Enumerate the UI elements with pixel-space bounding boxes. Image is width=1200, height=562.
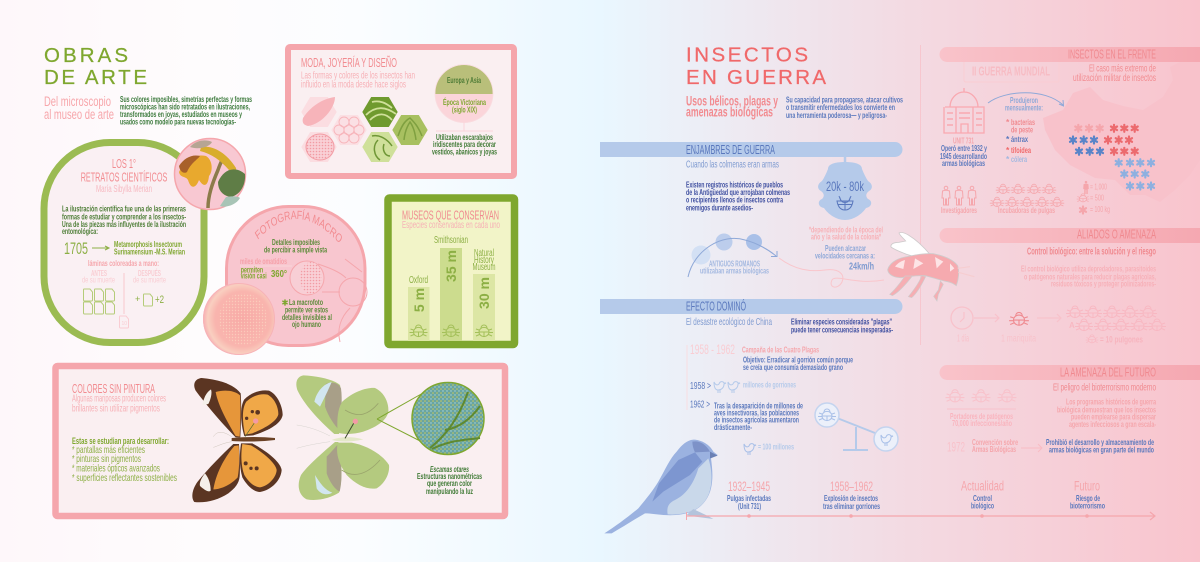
timeline guide [686, 345, 688, 410]
speed callout: Pueden alcanzar [825, 243, 866, 253]
title: obras de arte [44, 44, 147, 89]
text: campaña de las cuatro plagas: Campaña de las Cuatro Plagas [742, 344, 819, 354]
list: producción mensual: * [1006, 117, 1010, 127]
panel: moda, joyería y diseño [288, 47, 514, 176]
label box: II guerra mundial: II GUERRA MUNDIAL [972, 64, 1050, 79]
label: omatidios: miles de omatidios [240, 256, 287, 266]
subtitle: usos bélicos: Usos bélicos, plagas y [686, 94, 778, 109]
label: omatidios [240, 256, 287, 280]
panel: colores sin pintura [56, 366, 505, 516]
bar chart: especies por museo: 35 m [443, 250, 459, 282]
title: obras de arte: OBRAS [44, 44, 128, 67]
comparison: láminas antes y después: DESPUÉS [138, 268, 161, 278]
caption: escamas: manipulando la luz [426, 486, 473, 496]
panel: fotografía macro [203, 205, 368, 355]
milestone: 1932–1945: 1932–1945 [728, 479, 770, 494]
section bar: aliados [940, 228, 1200, 243]
bar chart: especies por museo: 5 m [411, 288, 427, 312]
pictogram: pulgones [1066, 306, 1166, 344]
label box: II guerra mundial [964, 62, 1059, 82]
list: producción mensual: bacterias [1011, 117, 1035, 127]
year 1705 callout: Metamorphosis Insectorum [114, 239, 182, 249]
section: efecto dominó [600, 299, 902, 455]
pictogram: incubadoras [990, 184, 1064, 215]
section bar: enjambres [600, 142, 902, 157]
body text: retratos [62, 204, 186, 236]
icons: portadores [946, 390, 1016, 409]
heading: museos: MUSEOS QUE CONSERVAN [402, 208, 499, 222]
text: eliminar especies [791, 316, 893, 335]
icon: clock one day: 1 día [957, 334, 969, 345]
icon: clock one day [951, 307, 999, 345]
row: 1962 insectos: drásticamente- [714, 422, 752, 432]
legend: unidades: = 500 [1090, 192, 1104, 202]
caption: escamas: Estructuras nanométricas [417, 471, 482, 481]
speed callout: 24km/h [849, 261, 874, 272]
comparison: láminas antes y después: de su muerte [133, 274, 166, 284]
text: unit 731 [940, 136, 987, 168]
text: detalles imposibles: de percibir a simple vista [264, 245, 327, 255]
image: orange butterfly [192, 378, 283, 502]
list: aplicaciones: * pantallas más eficientes [72, 444, 145, 456]
convention 1972 [947, 437, 1154, 455]
comparison: láminas antes y después: +2 [155, 294, 164, 306]
title: insectos en guerra [686, 44, 826, 89]
caption: portadores: Portadores de patógenos [950, 411, 1013, 421]
panel frame: macro [226, 206, 365, 346]
body text: enjambres: de la Antigüedad que arrojaban colmenas [686, 187, 790, 197]
vertical divider [920, 45, 922, 345]
subtitle: china: El desastre ecológico de China [686, 316, 772, 328]
text: unit 731: 1945 desarrollando [940, 151, 987, 161]
intro text: usados como modelo para nuevas tecnologías- [120, 116, 236, 126]
timeline [686, 479, 1155, 520]
note: colonia: *dependiendo de la época del [809, 224, 883, 234]
heading: colores: COLORES SIN PINTURA [72, 381, 155, 396]
title: insectos en guerra: INSECTOS [686, 44, 808, 67]
note: colonia: año y la salud de la colonia* [811, 232, 881, 242]
list: producción mensual: * [1006, 154, 1010, 164]
milestone: 1958–1962: 1958–1962 [830, 479, 873, 494]
section: la amenaza del futuro [940, 365, 1200, 455]
icon: balance seesaw insect vs bird [815, 403, 898, 451]
list: producción mensual: tifoidea [1011, 145, 1031, 155]
subtitle: usos bélicos: amenazas biológicas [686, 105, 773, 120]
intro text: Sus colores imposibles, simetrías perfectas y formas [120, 94, 252, 104]
milestone: futuro [1070, 479, 1105, 510]
body text: futuro [1057, 396, 1156, 429]
text: macrofoto note: ojo humano [292, 319, 321, 329]
year 1705 callout [64, 239, 185, 258]
text: macrofoto note [282, 297, 332, 329]
title: insectos en guerra: EN GUERRA [686, 66, 826, 89]
intro text: transformados en joyas, estudiados en museos y [120, 109, 242, 119]
timeline axis [686, 512, 1155, 520]
comparison: láminas antes y después [82, 258, 166, 328]
note: colonia [809, 224, 883, 242]
list: producción mensual: * [1006, 145, 1010, 155]
list: producción mensual: cólera [1011, 154, 1027, 164]
intro text: insectos en guerra [786, 95, 903, 120]
milestone: actualidad: Control [973, 493, 992, 503]
milestone: 1932–1945: Pulgas infectadas [727, 493, 771, 503]
caption: escamas: que generan color [427, 478, 472, 488]
panel frame: museos [388, 198, 514, 344]
heading: enjambres: ENJAMBRES DE GUERRA [686, 142, 775, 157]
list: aplicaciones: Estas se estudian para desarrollar: [72, 436, 169, 447]
subtitle: enjambres: Cuando las colmenas eran armas [686, 158, 779, 170]
caption: antiguos romanos [700, 259, 769, 276]
pictogram: kg per disease on map [1070, 125, 1154, 190]
intro text [120, 94, 252, 126]
circle: época victoriana: Época Victoriana [443, 97, 486, 107]
speed callout [815, 243, 875, 272]
legend: unidades: = 100 kg [1090, 204, 1110, 214]
text: campaña de las cuatro plagas [690, 342, 853, 372]
legend: unidades: = 1,000 [1090, 181, 1107, 191]
caption: portadores: 70,000 infecciones/año [952, 418, 1012, 428]
icon: hive with count: 20k - 80k [826, 179, 864, 194]
icon: compound eye outline [240, 259, 367, 342]
pictogram: investigadores: Investigadores [941, 205, 977, 215]
caption: escamas [417, 464, 482, 496]
caption: escarabajos iridiscentes [432, 132, 497, 156]
body text: enjambres: o recipientes llenos de insectos contra [686, 195, 783, 205]
milestone: 1932–1945 [727, 479, 771, 511]
milestone: 1958–1962: tras eliminar gorriones [823, 501, 880, 511]
icon: unit 731 building [944, 88, 984, 133]
panel: los 1° retratos científicos [44, 142, 204, 342]
milestone: actualidad [961, 479, 1004, 510]
subtitle: moda [301, 70, 415, 90]
zoom: wing scales circle [377, 382, 484, 454]
heading: retratos científicos: María Sibylla Merian [96, 183, 152, 195]
row: 1962 insectos: Tras la desaparición de millones de [714, 400, 803, 410]
caption: escamas: Escamas otares [430, 464, 469, 474]
icon: ladybug: 1 mariquita [1001, 334, 1036, 345]
text: macrofoto note: detalles invisibles al [282, 312, 332, 322]
circle: época victoriana [435, 64, 493, 123]
text: detalles imposibles: Detalles imposibles [272, 237, 320, 247]
body text: retratos: La ilustración científica fue una de las primeras [62, 204, 186, 214]
subtitle: caso extremo [1073, 63, 1156, 84]
text: campaña de las cuatro plagas: Objetivo: Erradicar al gorrión común porque [743, 355, 853, 365]
text: eliminar especies: Eliminar especies consideradas "plagas" [791, 316, 892, 326]
connector under circle [436, 122, 493, 131]
curved heading: fotografía macro: FOTOGRAFÍA MACRO [254, 209, 342, 242]
text: detalles imposibles [264, 237, 327, 255]
list: producción mensual [1005, 95, 1043, 164]
legend: unidades [1077, 181, 1110, 214]
list: aplicaciones: * materiales ópticos avanzados [72, 463, 160, 475]
bar chart: especies por museo: 30 m [476, 277, 492, 309]
subtitle: caso extremo: El caso más extremo de [1089, 63, 1156, 75]
body text: retratos: entomológica: [62, 226, 98, 236]
convention 1972: Convención sobre [972, 437, 1018, 447]
hexagons: pink jewellery motifs [301, 97, 367, 162]
subtitle: museos: Especies conservadas en cada uno [402, 219, 500, 231]
list: producción mensual: Produjeron [1010, 95, 1038, 105]
body text: enjambres: Existen registros históricos de pueblos [686, 180, 783, 190]
intro text: insectos en guerra: o transmitir enfermedades los convierte en [786, 102, 895, 112]
section: enjambres de guerra [600, 142, 902, 287]
subtitle: del microscopio al museo de arte: al museo de arte [44, 107, 114, 122]
body text: retratos: formas de estudiar y comprender a los insectos- [62, 212, 186, 222]
caption: escarabajos iridiscentes: Utilizaban escarabajos [436, 132, 493, 142]
subtitle: moda: influido en la moda desde hace siglos [301, 78, 406, 90]
subtitle: colores [72, 393, 166, 415]
milestone: futuro: Riesgo de [1076, 493, 1100, 503]
comparison: láminas antes y después: 10 [122, 321, 127, 327]
section: insectos en el frente [940, 47, 1200, 215]
panel frame: retratos [44, 142, 204, 342]
subtitle: del microscopio al museo de arte: Del microscopio [44, 94, 111, 109]
list: aplicaciones [72, 436, 177, 484]
caption: escarabajos iridiscentes: iridiscentes para decorar [433, 139, 496, 149]
milestone: actualidad: biológico [971, 500, 994, 510]
hexagons: green jewellery motifs [362, 97, 428, 162]
heading: retratos científicos: LOS 1° [112, 156, 136, 171]
legend: bird equals 100 millones [744, 441, 794, 455]
comparison: láminas antes y después: láminas coloreadas a mano: [88, 258, 159, 268]
bar chart: especies por museo: Museum [472, 262, 496, 273]
body text: control biológico [1021, 264, 1156, 289]
list: aplicaciones: * pinturas sin pigmentos [72, 453, 141, 465]
heading: moda: MODA, JOYERÍA Y DISEÑO [301, 55, 397, 70]
label: omatidios: 360° [271, 269, 287, 280]
body text: retratos: Una de las piezas más influyentes de la ilustración [62, 219, 186, 229]
bar chart: especies por museo: History [474, 255, 494, 266]
row: 1962 insectos: de insectos agrícolas aumentaron [714, 415, 799, 425]
label: omatidios: visión casi [241, 270, 267, 280]
map: china [1043, 57, 1200, 202]
heading: efecto dominó: EFECTO DOMINÓ [686, 299, 746, 314]
row: 1958 gorriones: millones de gorriones [743, 379, 796, 389]
milestone: 1932–1945: (Unit 731) [738, 501, 761, 511]
icon: hive with count [818, 156, 872, 220]
year 1705 callout: 1705 [64, 239, 88, 258]
heading: retratos científicos: RETRATOS CIENTÍFICOS [81, 170, 167, 185]
subtitle: colores: Algunas mariposas producen colores [72, 393, 166, 405]
image: sparrow illustration [604, 440, 718, 533]
label: omatidios: permiten [241, 265, 263, 275]
row: 1962 insectos: aves insectívoras, las poblaciones [714, 408, 799, 418]
arrow: production arc [988, 93, 1064, 106]
icon: ladybug [1001, 312, 1061, 345]
flight path curve [779, 258, 884, 287]
circle: época victoriana: Europa y Asia [447, 75, 481, 85]
milestone: futuro: Futuro [1074, 479, 1100, 494]
bar chart: especies por museo: Oxford [409, 275, 428, 286]
pictogram: investigadores [941, 186, 977, 215]
comparison: láminas antes y después: ANTES [91, 268, 107, 278]
pictogram: pulgones: = 10 pulgones [1100, 334, 1143, 344]
panel frame: colores [56, 366, 505, 516]
panel frame: moda [288, 47, 514, 176]
subtitle: del microscopio al museo de arte [44, 94, 114, 122]
section: aliados o amenaza [940, 226, 1200, 345]
convention 1972: Armas Biológicas [972, 444, 1016, 454]
text: eliminar especies: puede tener consecuencias inesperadas- [791, 325, 893, 335]
comparison: láminas antes y después: de su muerte [82, 274, 115, 284]
caption: antiguos romanos: utilizaban armas biológicas [700, 266, 769, 276]
pictogram: incubadoras: Incubadoras de pulgas [998, 205, 1055, 215]
text: unit 731: Operó entre 1932 y [941, 143, 987, 153]
text: campaña de las cuatro plagas: 1958 - 1962 [690, 342, 735, 357]
panel: museos que conservan [388, 198, 514, 344]
pictogram: pulgones: A [1069, 321, 1075, 330]
text: campaña de las cuatro plagas: se creía que consumía demasiado grano [743, 362, 843, 372]
subtitle: usos bélicos [686, 94, 778, 120]
intro text: insectos en guerra: Su capacidad para propagarse, atacar cultivos [786, 95, 903, 105]
legend: bird equals 100 millones: = 100 millones [758, 441, 794, 451]
text: unit 731: armas biológicas [942, 158, 985, 168]
milestone: 1958–1962 [823, 479, 880, 511]
illustration: Merian botanical circle [174, 138, 246, 210]
bar chart: especies por museo: Natural [474, 248, 494, 259]
text: macrofoto note: La macrofoto [289, 297, 323, 307]
bar chart: especies por museo: Smithsonian [434, 235, 468, 246]
row: 1962 insectos [690, 399, 803, 432]
title: obras de arte: DE ARTE [44, 66, 147, 89]
subtitle: moda: Las formas y colores de los insectos han [301, 70, 415, 82]
list: aplicaciones: * superficies reflectantes sostenibles [72, 472, 177, 484]
list: producción mensual: * [1006, 134, 1010, 144]
body text: enjambres [686, 180, 790, 213]
caption: portadores [950, 411, 1013, 428]
heading: retratos científicos [81, 156, 167, 195]
bar chart: especies por museo [408, 235, 496, 341]
speed callout: velocidades cercanas a: [815, 250, 875, 260]
text: macrofoto note: permite ver estos [285, 305, 328, 315]
section bar: frente [940, 47, 1200, 62]
arrow: thrown hive arc [688, 234, 777, 277]
circle: época victoriana: (siglo XIX) [452, 105, 477, 115]
milestone: 1958–1962: Explosión de insectos [824, 493, 878, 503]
milestone: actualidad: Actualidad [961, 479, 1004, 494]
section bar: futuro [940, 365, 1200, 380]
text: unit 731: UNIT 731 [953, 136, 974, 146]
section bar: efecto dominó [600, 299, 902, 314]
image: bee illustration [888, 232, 974, 301]
comparison: láminas antes y después: + [135, 294, 140, 304]
image: green leaf butterfly [296, 375, 389, 500]
intro text: insectos en guerra: una herramienta poderosa— y peligrosa- [786, 110, 887, 120]
body text: enjambres: enemigos durante asedios- [686, 203, 753, 213]
convention 1972: 1972 [947, 440, 965, 455]
intro text: microscópicas han sido retratados en ilustraciones, [120, 102, 250, 112]
caption: antiguos romanos: ANTIGUOS ROMANOS [709, 259, 760, 269]
caption: escarabajos iridiscentes: vestidos, abanicos y joyas [432, 146, 497, 156]
list: producción mensual: de peste [1011, 125, 1033, 135]
list: producción mensual: mensualmente: [1005, 103, 1043, 113]
row: 1958 gorriones: 1958 > [690, 381, 711, 392]
row: 1962 insectos: 1962 > [690, 399, 710, 410]
row: 1958 gorriones [690, 379, 796, 393]
year 1705 callout: Surinamensium -M.S. Merian [114, 246, 185, 256]
image: insect eye sphere [203, 283, 275, 355]
milestone: futuro: bioterrorismo [1070, 500, 1105, 510]
subtitle: colores: brillantes sin utilizar pigmentos [72, 403, 160, 415]
list: producción mensual: ántrax [1011, 134, 1028, 144]
